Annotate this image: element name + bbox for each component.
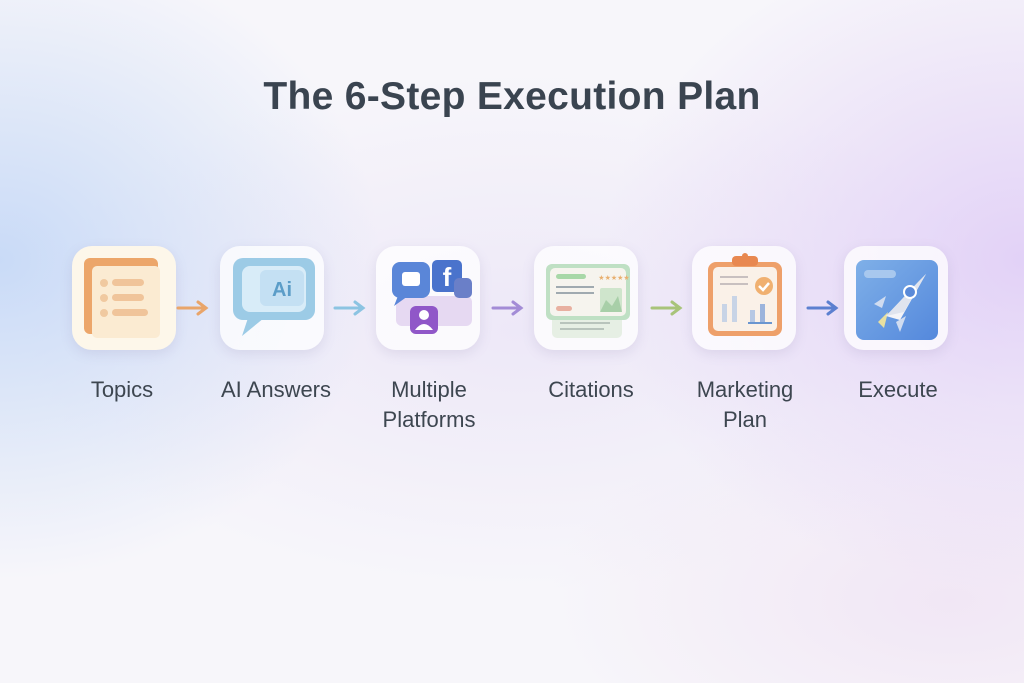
arrow 2 <box>334 300 366 316</box>
tile: multiple platforms <box>376 246 480 350</box>
tile: citations <box>534 246 638 350</box>
tile: multiple platforms: f <box>443 262 452 292</box>
label: multiple platforms: Multiple <box>391 377 467 402</box>
label: topics: Topics <box>91 377 153 402</box>
tile: topics <box>72 246 176 350</box>
label: citations: Citations <box>548 377 634 402</box>
tile: AI answers <box>220 246 324 350</box>
label: multiple platforms: Platforms <box>383 407 475 432</box>
label: multiple platforms <box>383 377 475 432</box>
tile: execute <box>844 246 948 350</box>
label: AI answers: AI Answers <box>221 377 331 402</box>
label: marketing plan <box>697 377 793 432</box>
label: execute: Execute <box>858 377 938 402</box>
arrow 5 <box>806 300 838 316</box>
arrow 4 <box>650 300 682 316</box>
tile: AI answers: Ai <box>272 279 292 301</box>
label: marketing plan: Marketing <box>697 377 793 402</box>
tile: citations: ★★★★★ <box>598 274 630 282</box>
title: The 6-Step Execution Plan <box>263 75 761 118</box>
arrow 3 <box>492 300 524 316</box>
tile: marketing plan <box>692 246 796 350</box>
label: marketing plan: Plan <box>723 407 767 432</box>
arrow 1 <box>176 300 208 316</box>
